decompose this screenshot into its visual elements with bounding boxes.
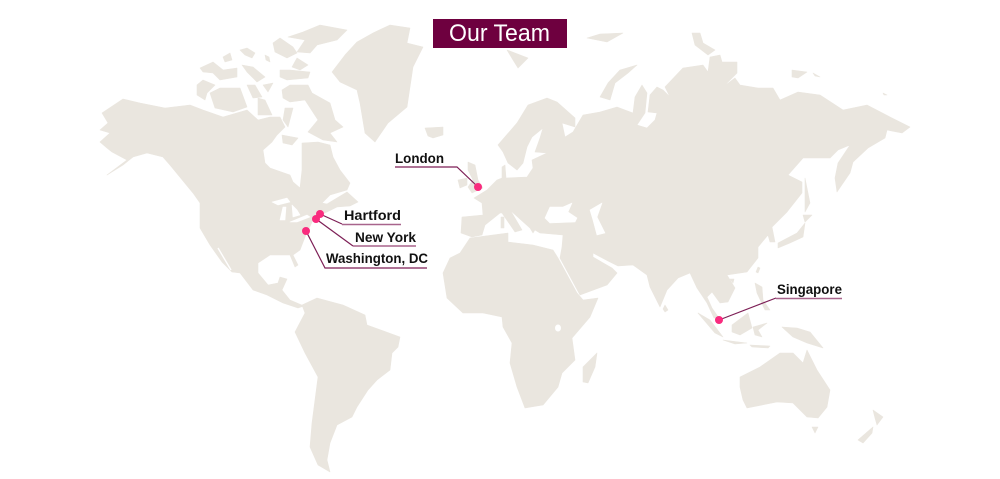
water: Great Lakes and Gulf of California <box>218 198 310 270</box>
marker: Washington, DC: Washington, DC <box>326 250 428 266</box>
land: North America <box>100 99 358 308</box>
marker: London: London <box>395 150 444 166</box>
land: Eurasia <box>461 55 910 318</box>
marker: Washington, DC <box>302 227 428 268</box>
land: islands of Asia and Oceania <box>501 33 887 443</box>
land: Greenland <box>332 25 423 142</box>
world map <box>100 25 910 472</box>
marker: New York: New York <box>355 229 416 245</box>
marker: London <box>395 150 482 191</box>
land: Iceland <box>425 127 443 138</box>
land: Britain and Ireland <box>458 162 483 193</box>
marker: New York <box>312 215 416 246</box>
marker: Hartford <box>316 207 401 224</box>
water: Lake Victoria <box>555 324 561 332</box>
marker: Singapore: Singapore <box>777 281 842 297</box>
land: South America <box>295 298 400 472</box>
marker: Singapore <box>715 281 842 324</box>
water: Black Sea and Caspian Sea <box>545 203 605 235</box>
marker: Hartford: Hartford <box>344 207 401 223</box>
land: Africa <box>443 233 598 408</box>
title: Our Team <box>449 20 550 47</box>
land: Arctic Canada islands <box>197 25 347 145</box>
